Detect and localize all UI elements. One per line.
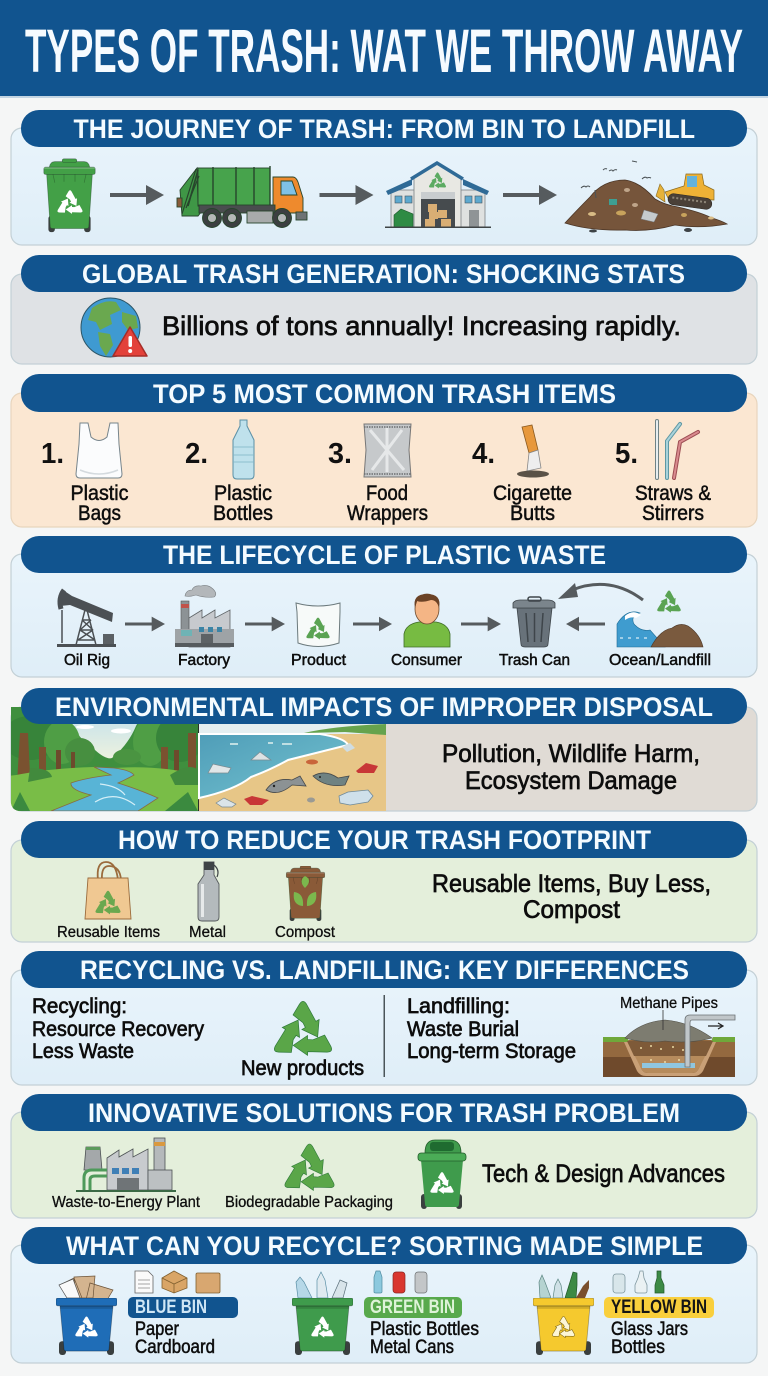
item 4: cigarette butts: Butts	[510, 502, 555, 525]
reduce text: Reusable Items, Buy Less,	[432, 870, 711, 898]
recycling column text: Recycling:	[32, 995, 127, 1018]
arrow: curved return	[558, 583, 643, 600]
heading: top 5: TOP 5 MOST COMMON TRASH ITEMS	[153, 379, 616, 409]
item 4: cigarette butts: Cigarette	[493, 482, 572, 505]
step: oil rig	[57, 590, 116, 669]
item 5: straws and stirrers: 5.	[615, 438, 638, 470]
heading: sorting: WHAT CAN YOU RECYCLE? SORTING MADE SIMPLE	[66, 1231, 703, 1261]
icon: biodegradable packaging: Biodegradable Packaging	[225, 1194, 393, 1211]
landfilling column text: Waste Burial	[407, 1018, 519, 1041]
step: ocean and landfill	[609, 590, 711, 669]
step: trash can: Trash Can	[499, 652, 570, 669]
step: factory: Factory	[178, 652, 230, 669]
heading: innovative: INNOVATIVE SOLUTIONS FOR TRASH PROBLEM	[88, 1098, 680, 1128]
item 3: food wrappers	[328, 424, 428, 525]
arrow	[461, 617, 501, 631]
step: consumer	[391, 594, 463, 669]
panel: environmental impacts	[2, 688, 757, 811]
heading: journey: THE JOURNEY OF TRASH: FROM BIN TO LANDFILL	[74, 114, 695, 144]
bin group: yellow: Bottles	[611, 1337, 665, 1358]
icon: green wheelie bin	[44, 159, 95, 232]
item 3: food wrappers: Wrappers	[347, 502, 428, 525]
stat text: Billions of tons annually! Increasing rapidly.	[162, 311, 681, 341]
panel: lifecycle of plastic	[11, 536, 757, 677]
recycling column text: Resource Recovery	[32, 1018, 204, 1041]
item 2: plastic bottles: Bottles	[213, 502, 273, 525]
image: river forest	[2, 707, 204, 811]
recycling column text: Less Waste	[32, 1040, 134, 1063]
arrow: truck to facility	[320, 185, 374, 205]
bin group: yellow: Glass Jars	[611, 1319, 688, 1340]
icon: metal bottle	[189, 862, 226, 941]
item 2: plastic bottles: 2.	[185, 438, 208, 470]
icon: recycling symbol	[267, 1001, 336, 1064]
step: product bag: Product	[291, 652, 347, 669]
icon: garbage truck	[177, 166, 307, 228]
new products label: New products	[241, 1057, 364, 1080]
item 5: straws and stirrers: Stirrers	[642, 502, 704, 525]
step: oil rig: Oil Rig	[64, 652, 110, 669]
item 5: straws and stirrers	[615, 421, 711, 525]
heading: recycling vs landfilling: RECYCLING VS. LANDFILLING: KEY DIFFERENCES	[80, 955, 689, 985]
item 2: plastic bottles: Plastic	[214, 482, 272, 505]
step: product bag	[291, 603, 347, 669]
methane label: Methane Pipes	[620, 995, 718, 1012]
reduce text	[432, 870, 711, 924]
heading: global: GLOBAL TRASH GENERATION: SHOCKING STATS	[82, 259, 685, 289]
arrow	[125, 617, 165, 631]
bin group: blue: Cardboard	[135, 1337, 215, 1358]
item 3: food wrappers: Food	[366, 482, 408, 505]
icon: reusable bag: Reusable Items	[57, 924, 160, 941]
item 1: plastic bags: Plastic	[70, 482, 128, 505]
landfilling column text: Landfilling:	[407, 995, 510, 1018]
impacts text: Pollution, Wildlife Harm,	[442, 740, 700, 768]
icon: metal bottle: Metal	[189, 924, 226, 941]
heading: lifecycle: THE LIFECYCLE OF PLASTIC WASTE	[163, 540, 606, 570]
icon: waste-to-energy plant	[52, 1138, 201, 1211]
icon: green bin	[418, 1140, 466, 1209]
header banner	[0, 0, 768, 98]
item 1: plastic bags: 1.	[41, 438, 64, 470]
item 1: plastic bags	[41, 423, 128, 525]
panel: innovative solutions	[11, 1094, 757, 1218]
panel: what can you recycle	[11, 1227, 757, 1363]
heading: impacts: ENVIRONMENTAL IMPACTS OF IMPROPER DISPOSAL	[55, 692, 713, 722]
panel: reduce your footprint	[11, 821, 757, 942]
panel: recycling vs landfilling	[11, 951, 757, 1085]
arrow	[245, 617, 285, 631]
panel: top 5 items	[11, 374, 757, 527]
image: polluted beach	[199, 724, 386, 811]
step: factory	[175, 585, 234, 669]
bin group: blue: Paper	[135, 1319, 180, 1340]
step: trash can	[499, 597, 570, 669]
arrow: bin to truck	[110, 185, 164, 205]
reduce text: Compost	[523, 896, 620, 924]
bin group: blue	[56, 1271, 238, 1358]
arrow	[353, 617, 392, 631]
icon: compost bin	[275, 866, 336, 941]
item 2: plastic bottles	[185, 420, 273, 525]
bin group: green	[292, 1271, 479, 1358]
tech text: Tech & Design Advances	[482, 1160, 725, 1188]
icon: recycling facility	[385, 163, 491, 228]
step: consumer: Consumer	[391, 652, 463, 669]
bin group: green: Metal Cans	[370, 1337, 454, 1358]
landfilling column text	[407, 995, 576, 1063]
bin group: yellow: YELLOW BIN	[611, 1297, 707, 1318]
bin group: blue: BLUE BIN	[135, 1297, 207, 1318]
bin group: yellow	[533, 1271, 714, 1358]
arrow: reverse	[566, 617, 605, 631]
landfilling column text: Long-term Storage	[407, 1040, 576, 1063]
bin group: green: Plastic Bottles	[370, 1319, 479, 1340]
diagram: landfill cross-section	[603, 1010, 735, 1077]
icon: globe with warning	[81, 298, 147, 357]
item 1: plastic bags: Bags	[78, 502, 121, 525]
panel: global trash generation	[11, 255, 757, 364]
panel: the journey of trash	[11, 110, 757, 245]
heading: reduce: HOW TO REDUCE YOUR TRASH FOOTPRINT	[118, 825, 651, 855]
icon: reusable bag	[57, 862, 160, 941]
item 4: cigarette butts	[472, 425, 572, 525]
icon: biodegradable packaging	[225, 1144, 393, 1211]
impacts text	[442, 740, 700, 795]
icon: compost bin: Compost	[275, 924, 336, 941]
recycling column text	[32, 995, 204, 1063]
icon: landfill with bulldozer	[565, 161, 727, 232]
icon: waste-to-energy plant: Waste-to-Energy Plant	[52, 1194, 201, 1211]
arrow: facility to landfill	[503, 185, 557, 205]
step: ocean and landfill: Ocean/Landfill	[609, 652, 711, 669]
item 5: straws and stirrers: Straws &	[635, 482, 711, 505]
item 4: cigarette butts: 4.	[472, 438, 495, 470]
bin group: green: GREEN BIN	[370, 1297, 455, 1318]
item 3: food wrappers: 3.	[328, 438, 352, 470]
impacts text: Ecosystem Damage	[465, 767, 677, 795]
